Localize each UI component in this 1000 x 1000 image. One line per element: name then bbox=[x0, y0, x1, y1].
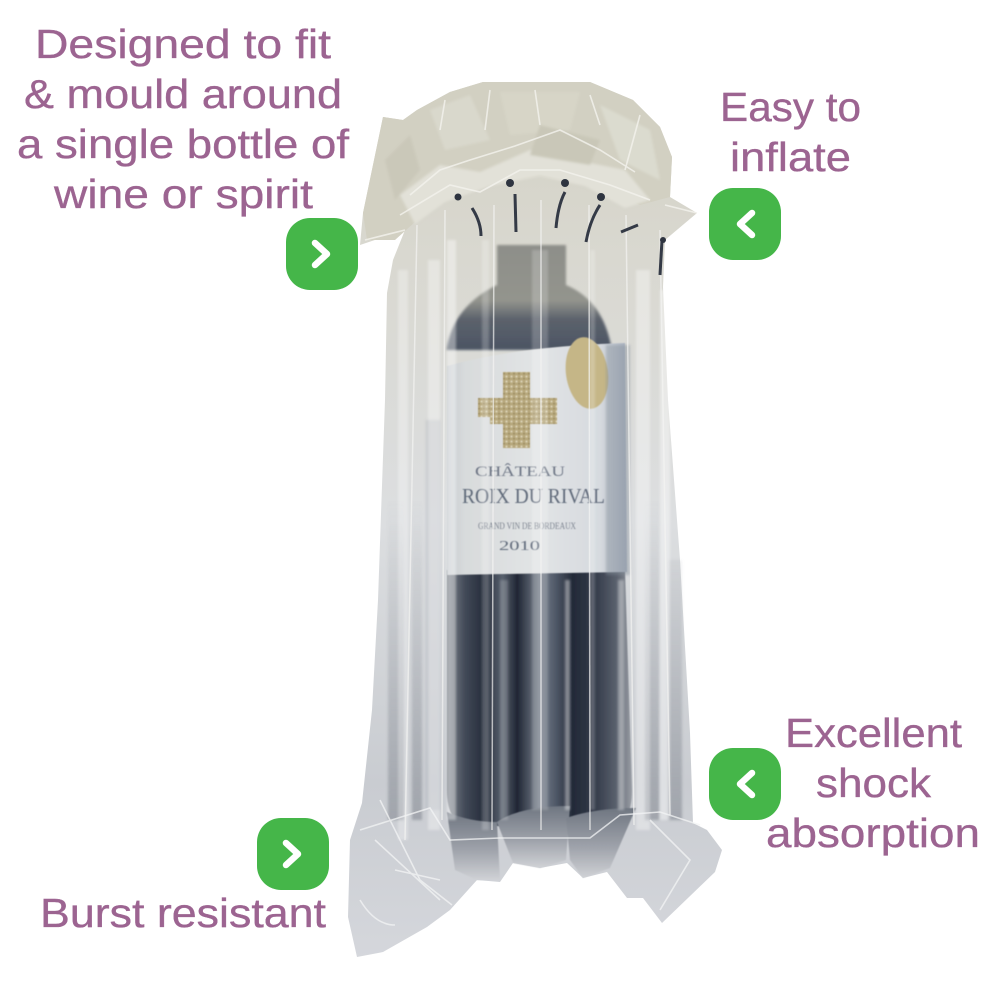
air column seams bbox=[405, 200, 670, 840]
heading: designed to fit: & mould around bbox=[24, 71, 342, 117]
wine label bbox=[447, 343, 627, 575]
chevron left bbox=[740, 773, 752, 795]
heading: burst resistant: Burst resistant bbox=[40, 890, 327, 936]
inflation valves bbox=[472, 192, 662, 275]
label text: 2010 bbox=[499, 539, 540, 554]
heading: excellent shock absorption: absorption bbox=[766, 810, 980, 856]
heading: designed to fit: a single bottle of bbox=[17, 121, 350, 167]
button: arrow right, burst resistant bbox=[257, 818, 329, 890]
label text bbox=[462, 463, 605, 554]
button: arrow left, easy to inflate bbox=[709, 188, 781, 260]
air column highlights bbox=[398, 240, 670, 840]
heading: designed to fit: wine or spirit bbox=[53, 171, 314, 217]
button: arrow left, shock absorption bbox=[709, 748, 781, 820]
bottom sealed wrinkles bbox=[360, 800, 700, 925]
chevron right bbox=[315, 243, 327, 265]
label text: ROIX DU RIVAL bbox=[462, 484, 605, 508]
ruffle lighter folds bbox=[385, 92, 660, 224]
chevron left bbox=[740, 213, 752, 235]
chevron right bbox=[286, 843, 298, 865]
gold cross emblem bbox=[478, 372, 557, 448]
heading: easy to inflate: Easy to bbox=[720, 84, 861, 130]
photo: wine bottle in inflatable air column bag bbox=[348, 82, 722, 957]
valve tips bbox=[454, 179, 666, 243]
bottle neck and shoulder bbox=[447, 245, 612, 350]
side columns shading bbox=[388, 345, 682, 820]
button: arrow right, designed to fit bbox=[286, 218, 358, 290]
bottom column lobes bbox=[447, 806, 636, 880]
heading: easy to inflate: inflate bbox=[730, 134, 851, 180]
heading: designed to fit: Designed to fit bbox=[35, 21, 332, 67]
heading: easy to inflate bbox=[720, 84, 861, 180]
gold medal seal bbox=[561, 334, 613, 412]
heading: excellent shock absorption: Excellent bbox=[785, 710, 963, 756]
top ruffle bbox=[363, 82, 672, 240]
bottle lower body bbox=[447, 570, 632, 826]
heading: excellent shock absorption bbox=[766, 710, 980, 856]
label text: GRAND VIN DE BORDEAUX bbox=[478, 521, 576, 531]
bag silhouette bbox=[348, 82, 722, 957]
ruffle creases bbox=[365, 90, 697, 240]
label text: CHÂTEAU bbox=[475, 463, 565, 480]
heading: designed to fit bbox=[17, 21, 350, 217]
heading: excellent shock absorption: shock bbox=[816, 760, 932, 806]
